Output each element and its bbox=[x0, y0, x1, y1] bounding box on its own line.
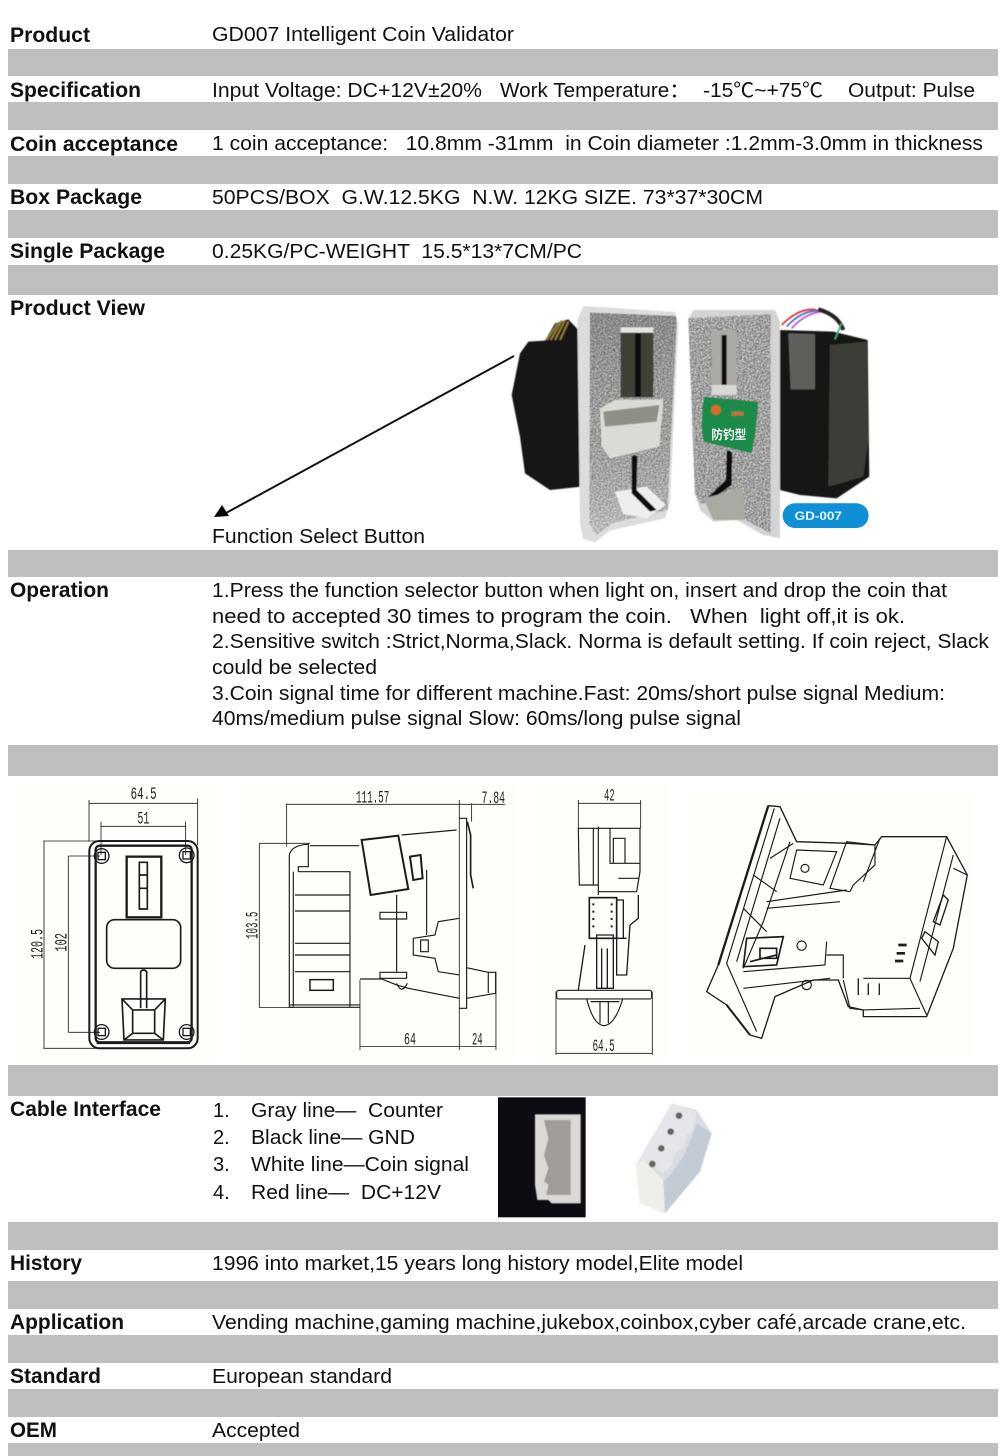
row: cable interface: Cable Interface bbox=[10, 1098, 161, 1121]
row: standard bbox=[10, 1365, 392, 1388]
row: specification: Work Temperature： bbox=[500, 80, 690, 102]
technical drawing: side view bbox=[240, 783, 517, 1060]
model badge: GD-007 bbox=[795, 509, 842, 523]
row: specification: Output: Pulse bbox=[848, 80, 975, 102]
row: coin acceptance: Coin acceptance bbox=[10, 133, 178, 156]
row: specification: -15℃~+75℃ bbox=[703, 80, 823, 102]
row: product bbox=[10, 24, 514, 47]
technical drawing: front view: 102 bbox=[53, 933, 73, 952]
row: oem: OEM bbox=[10, 1419, 57, 1442]
right faceplate bbox=[688, 310, 780, 538]
row: coin acceptance: 1 coin acceptance: 10.8mm -31mm in Coin diameter :1.2mm-3.0mm in thickness bbox=[212, 133, 983, 155]
row: cable interface: Black line— GND bbox=[251, 1127, 415, 1149]
row: operation: 3.Coin signal time for different machine.Fast: 20ms/short pulse signal Medium: bbox=[212, 683, 945, 705]
row: oem bbox=[10, 1419, 300, 1442]
technical drawing: end view bbox=[537, 783, 670, 1060]
row: specification: Input Voltage: DC+12V±20% bbox=[212, 80, 482, 102]
row: cable interface: 1. bbox=[213, 1100, 230, 1122]
row: oem: Accepted bbox=[212, 1420, 300, 1442]
left faceplate bbox=[577, 306, 678, 542]
photo: white connector plug bbox=[636, 1103, 712, 1213]
arrow: to function select button bbox=[214, 356, 514, 517]
row: box package: Box Package bbox=[10, 186, 142, 209]
model badge bbox=[783, 503, 869, 528]
row: history bbox=[10, 1252, 743, 1275]
row: application: Vending machine,gaming machine,jukebox,coinbox,cyber café,arcade crane,etc. bbox=[212, 1312, 966, 1334]
technical drawing: end view: 64.5 bbox=[593, 1037, 615, 1057]
photo: connector socket on dark background bbox=[498, 1097, 586, 1217]
heading: product view: Product View bbox=[10, 297, 146, 320]
row: single package: 0.25KG/PC-WEIGHT 15.5*13*7CM/PC bbox=[212, 241, 582, 263]
label: function select button: Function Select Button bbox=[212, 526, 425, 548]
row: product: GD007 Intelligent Coin Validator bbox=[212, 24, 514, 46]
row: operation: Operation bbox=[10, 579, 109, 602]
row: box package: 50PCS/BOX G.W.12.5KG N.W. 12KG SIZE. 73*37*30CM bbox=[212, 187, 763, 209]
row: standard: European standard bbox=[212, 1366, 392, 1388]
row: specification bbox=[10, 79, 975, 102]
right unit body bbox=[779, 330, 869, 498]
technical drawing: end view: 42 bbox=[604, 786, 615, 806]
row: specification: Specification bbox=[10, 79, 141, 102]
row: standard: Standard bbox=[10, 1365, 101, 1388]
technical drawing: front view: 120.5 bbox=[29, 929, 49, 959]
wires bbox=[782, 309, 843, 339]
row: cable interface: 2. bbox=[213, 1127, 230, 1149]
row: cable interface: 3. bbox=[213, 1154, 230, 1176]
technical drawing: isometric view bbox=[687, 793, 973, 1057]
row: application: Application bbox=[10, 1311, 124, 1334]
row: operation bbox=[10, 579, 990, 730]
row: single package: Single Package bbox=[10, 240, 165, 263]
row: cable interface: Red line— DC+12V bbox=[251, 1182, 442, 1204]
row: operation: need to accepted 30 times to program the coin. When light off,it is ok. bbox=[212, 606, 905, 628]
row: history: 1996 into market,15 years long history model,Elite model bbox=[212, 1253, 743, 1275]
row: product: Product bbox=[10, 24, 90, 47]
sticker text: 防钓型 bbox=[711, 424, 747, 443]
green anti-fishing sticker bbox=[702, 397, 758, 453]
left unit body bbox=[512, 319, 582, 490]
technical drawing: front view: 64.5 bbox=[131, 785, 157, 805]
technical drawing: side view: 111.57 bbox=[356, 788, 389, 808]
row: box package bbox=[10, 186, 763, 209]
technical drawing: front view bbox=[17, 783, 217, 1060]
row: operation: 40ms/medium pulse signal Slow: 60ms/long pulse signal bbox=[212, 708, 741, 730]
row: operation: 2.Sensitive switch :Strict,Norma,Slack. Norma is default setting. If coin reject, Slack bbox=[212, 631, 990, 653]
technical drawing: side view: 64 bbox=[404, 1030, 416, 1050]
row: history: History bbox=[10, 1252, 82, 1275]
row: single package bbox=[10, 240, 582, 263]
technical drawing: side view: 24 bbox=[472, 1030, 483, 1050]
technical drawing: side view: 103.5 bbox=[243, 912, 263, 939]
row: operation: could be selected bbox=[212, 657, 377, 679]
technical drawing: side view: 7.84 bbox=[482, 789, 505, 809]
row: cable interface bbox=[10, 1098, 469, 1204]
row: cable interface: 4. bbox=[213, 1182, 230, 1204]
row: cable interface: White line—Coin signal bbox=[251, 1154, 469, 1176]
row: cable interface: Gray line— Counter bbox=[251, 1100, 443, 1122]
technical drawing: front view: 51 bbox=[137, 810, 149, 830]
row: operation: 1.Press the function selector button when light on, insert and drop the coin that bbox=[212, 580, 947, 602]
product photo: coin validator front and back bbox=[512, 306, 869, 542]
